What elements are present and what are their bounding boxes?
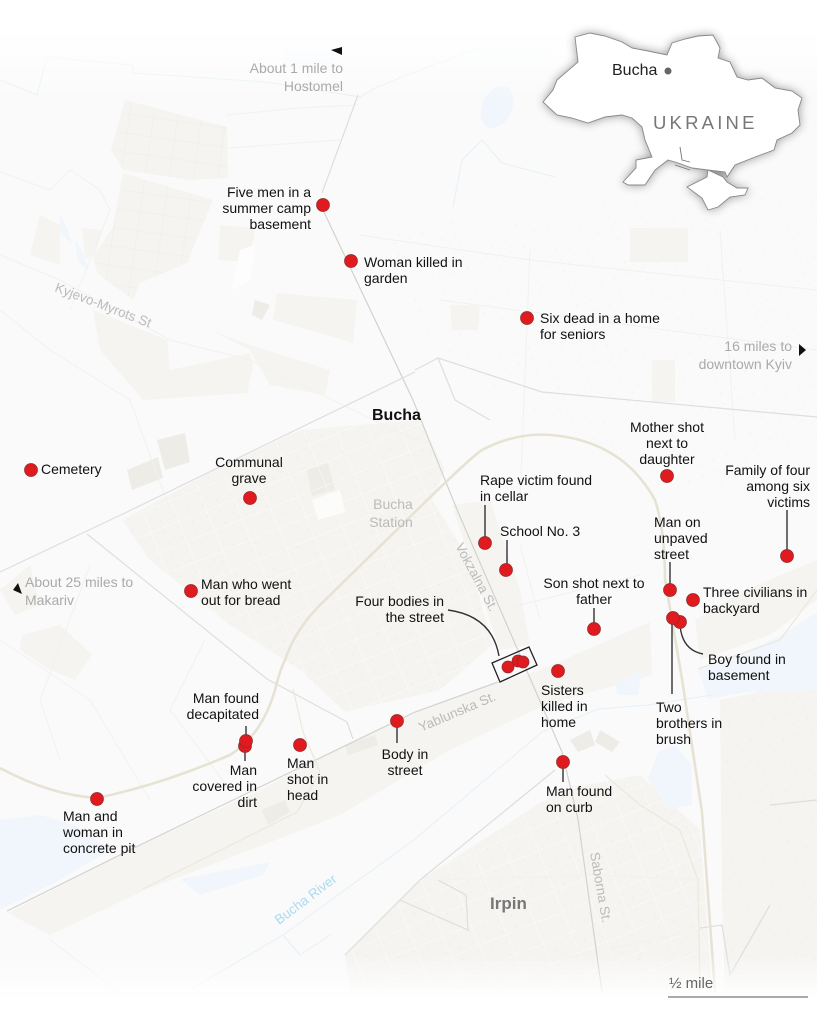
label: 16 miles to: [724, 338, 792, 354]
marker: Man on unpaved street: [654, 514, 708, 596]
marker: Body in street: street: [387, 762, 423, 778]
marker: Rape victim found in cellar: [478, 472, 592, 550]
marker: Man covered in dirt: [192, 740, 257, 810]
marker: Body in street: [382, 714, 428, 778]
label: Makariv: [25, 592, 74, 608]
marker: Boy found in basement: basement: [708, 667, 770, 683]
label: About 25 miles to: [25, 574, 133, 590]
marker: Family of four among six victims: [725, 462, 810, 562]
marker: Boy found in basement: Boy found in: [708, 651, 786, 667]
marker: Mother shot next to daughter: next to: [646, 435, 688, 451]
marker group: Four bodies in the street: [355, 593, 537, 682]
marker: Man found decapitated: [187, 690, 259, 748]
marker: Man who went out for bread: out for bread: [201, 592, 280, 608]
direction: Makariv: [13, 574, 133, 608]
dense buildings: [127, 300, 620, 825]
marker: Man shot in head: head: [287, 787, 318, 803]
marker: School No. 3: [500, 523, 580, 576]
marker: Man covered in dirt: dirt: [238, 794, 257, 810]
Crimea: [687, 170, 748, 210]
marker: Five men in a summer camp basement: summer camp: [222, 200, 311, 216]
marker: Sisters killed in home: Sisters: [541, 682, 584, 698]
marker group: Four bodies in the street: Four bodies in: [355, 593, 444, 609]
marker: Man shot in head: shot in: [287, 771, 328, 787]
country outline: [543, 33, 802, 185]
marker: Two brothers in brush: brothers in: [656, 715, 722, 731]
marker: Man on unpaved street: street: [654, 546, 689, 562]
marker: Man found decapitated: Man found: [193, 690, 259, 706]
Ukraine label: UKRAINE: [653, 112, 758, 133]
building and street texture: [93, 100, 817, 990]
marker: Man and woman in concrete pit: [62, 792, 135, 856]
marker: Family of four among six victims: among six: [746, 478, 810, 494]
marker: Two brothers in brush: Two: [656, 699, 682, 715]
Bucha inset label: Bucha: [612, 62, 657, 79]
river label: Bucha River: Bucha River: [272, 871, 340, 927]
marker: Family of four among six victims: victims: [767, 494, 810, 510]
marker: Man found decapitated: decapitated: [187, 706, 259, 722]
label: Hostomel: [284, 78, 343, 94]
marker: Son shot next to father: [543, 575, 645, 636]
place label: Irpin: Irpin: [490, 894, 527, 913]
Bucha inset dot: [664, 68, 672, 74]
marker: Man found on curb: on curb: [546, 799, 593, 815]
marker group: Four bodies in the street: the street: [386, 609, 444, 625]
label: downtown Kyiv: [699, 356, 792, 372]
marker: Three civilians in backyard: Three civilians in: [703, 584, 807, 600]
marker: Sisters killed in home: killed in: [541, 698, 588, 714]
marker: Five men in a summer camp basement: [222, 184, 330, 232]
scale bar: [668, 975, 808, 997]
marker: Three civilians in backyard: backyard: [703, 600, 760, 616]
scale bar: ½ mile: [669, 975, 713, 992]
marker: Son shot next to father: father: [576, 591, 612, 607]
place label: Bucha: Bucha: [372, 407, 421, 424]
street label: Yablunska St.: Yablunska St.: [416, 689, 498, 735]
arrow: [799, 344, 806, 356]
marker: Family of four among six victims: Family of four: [725, 462, 810, 478]
street label: Vokzalna St.: Vokzalna St.: [452, 540, 501, 614]
label: About 1 mile to: [250, 60, 343, 76]
marker: Man shot in head: [287, 738, 328, 803]
direction: Kyiv: [699, 338, 806, 372]
marker: Communal grave: [215, 454, 283, 504]
marker: Mother shot next to daughter: [630, 419, 704, 482]
marker: Man found on curb: Man found: [546, 783, 612, 799]
marker: Sisters killed in home: [541, 664, 588, 730]
marker: Three civilians in backyard: [686, 584, 807, 616]
marker: Man and woman in concrete pit: concrete pit: [63, 840, 135, 856]
marker: Man who went out for bread: [184, 576, 291, 608]
marker: School No. 3: School No. 3: [500, 523, 580, 539]
inset map: Ukraine: [543, 33, 802, 210]
shadow: [543, 33, 802, 210]
marker: Woman killed in garden: garden: [364, 270, 408, 286]
marker: Five men in a summer camp basement: Five men in a: [227, 184, 311, 200]
railway: [0, 435, 817, 992]
marker: Six dead in a home for seniors: Six dead in a home: [540, 310, 660, 326]
marker: Man and woman in concrete pit: woman in: [62, 824, 123, 840]
street label: Saborna St.: Saborna St.: [587, 851, 614, 924]
marker: Man on unpaved street: unpaved: [654, 530, 708, 546]
marker: Man shot in head: Man: [287, 755, 314, 771]
marker: Woman killed in garden: Woman killed in: [364, 254, 463, 270]
marker: Five men in a summer camp basement: basement: [250, 216, 311, 232]
marker: Six dead in a home for seniors: [520, 310, 660, 342]
marker: Man found on curb: [546, 756, 612, 815]
arrow: [13, 583, 22, 594]
marker: Mother shot next to daughter: Mother shot: [630, 419, 704, 435]
marker: Communal grave: grave: [231, 470, 267, 486]
marker: Son shot next to father: Son shot next to: [543, 575, 645, 591]
marker: Two brothers in brush: brush: [656, 731, 691, 747]
marker: Six dead in a home for seniors: for seniors: [540, 326, 605, 342]
rivers: [0, 47, 712, 988]
marker: Man who went out for bread: Man who went: [201, 576, 291, 592]
marker: Man and woman in concrete pit: Man and: [63, 808, 117, 824]
marker: Man on unpaved street: Man on: [654, 514, 701, 530]
marker: Cemetery: Cemetery: [41, 461, 102, 477]
marker: Communal grave: Communal: [215, 454, 283, 470]
marker: Rape victim found in cellar: in cellar: [480, 488, 529, 504]
marker: Boy found in basement: [674, 616, 786, 683]
marker: Man covered in dirt: covered in: [192, 778, 257, 794]
place label: Bucha Station: Bucha: [373, 496, 413, 512]
marker: Body in street: Body in: [382, 746, 428, 762]
marker: Two brothers in brush: [656, 612, 722, 747]
marker: Sisters killed in home: home: [541, 714, 576, 730]
place label: Bucha Station: Station: [369, 514, 413, 530]
Dnipro estuary: [675, 147, 690, 170]
street label: Kyjevo-Myrots St: Kyjevo-Myrots St: [53, 280, 154, 330]
marker: Rape victim found in cellar: Rape victim found: [480, 472, 592, 488]
marker: Mother shot next to daughter: daughter: [639, 451, 695, 467]
direction: Hostomel: [250, 47, 343, 94]
arrow: [331, 47, 342, 55]
marker: Woman killed in garden: [344, 254, 463, 286]
marker: Man covered in dirt: Man: [230, 762, 257, 778]
